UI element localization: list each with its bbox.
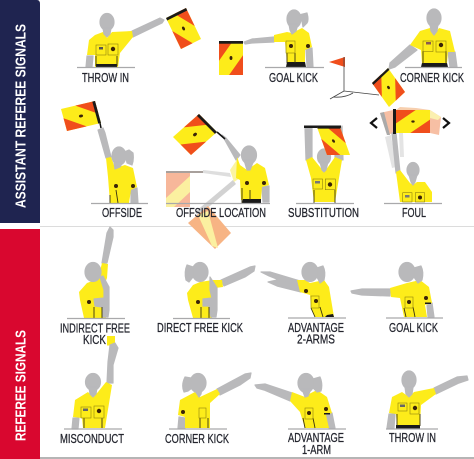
figure: referee advantage 2-arms	[261, 262, 346, 346]
flag: foul	[396, 110, 430, 133]
label: advantage 2-arms: ADVANTAGE	[288, 321, 344, 335]
label: advantage 1-arm: 1-ARM	[302, 443, 331, 457]
label: advantage 1-arm	[288, 431, 344, 457]
panel: assistant referee signals sidebar	[0, 0, 40, 223]
label: direct free kick: DIRECT FREE KICK	[157, 321, 243, 335]
icon: left chevron	[371, 118, 377, 128]
figure: referee direct free kick	[157, 262, 255, 335]
label: throw in: THROW IN	[389, 431, 436, 445]
label: advantage 2-arms: 2-ARMS	[297, 332, 335, 346]
label: advantage 2-arms	[288, 321, 344, 346]
flag: substitution	[317, 127, 350, 155]
figure: assistant foul	[371, 107, 449, 220]
label: advantage 1-arm: ADVANTAGE	[288, 431, 344, 445]
figure: assistant offside location	[166, 114, 270, 249]
icon: right chevron	[443, 118, 449, 128]
figure: referee misconduct	[60, 336, 124, 446]
figure: assistant substitution	[288, 126, 359, 220]
figure: assistant corner kick	[372, 9, 464, 107]
figure: referee goal kick	[351, 262, 443, 335]
flag: offside	[61, 101, 101, 131]
figure: referee throw in	[386, 371, 468, 445]
ghost flag: lower diamond	[188, 206, 231, 249]
figure: assistant goal kick	[219, 10, 324, 85]
figure: referee advantage 1-arm	[255, 374, 346, 457]
figure: referee indirect free kick	[60, 227, 130, 347]
label: offside location: OFFSIDE LOCATION	[176, 206, 266, 220]
label: foul: FOUL	[402, 206, 426, 220]
label: indirect free kick	[60, 322, 130, 347]
label: misconduct: MISCONDUCT	[60, 432, 124, 446]
flag: corner kick	[372, 68, 405, 107]
figure: assistant offside	[61, 101, 148, 220]
label: throw in: THROW IN	[82, 71, 129, 85]
label: substitution: SUBSTITUTION	[288, 206, 359, 220]
ghost flag: low left	[166, 171, 203, 207]
label: indirect free kick: KICK	[83, 333, 107, 347]
figure: assistant throw in	[77, 8, 201, 85]
panel: referee signals sidebar	[0, 229, 40, 459]
flag: throw in	[166, 8, 201, 49]
label: goal kick: GOAL KICK	[389, 321, 438, 335]
flag: goal kick	[219, 41, 243, 75]
label: indirect free kick: INDIRECT FREE	[60, 322, 130, 336]
icon: yellow card	[107, 336, 115, 346]
label: corner kick: CORNER KICK	[165, 432, 229, 446]
label: offside: OFFSIDE	[102, 206, 142, 220]
icon: corner flag	[329, 57, 379, 99]
panel: referee signals sidebar: REFEREE SIGNALS	[14, 330, 30, 441]
flag: offside location	[173, 114, 217, 155]
label: goal kick: GOAL KICK	[269, 71, 318, 85]
figure: referee corner kick	[165, 373, 251, 446]
